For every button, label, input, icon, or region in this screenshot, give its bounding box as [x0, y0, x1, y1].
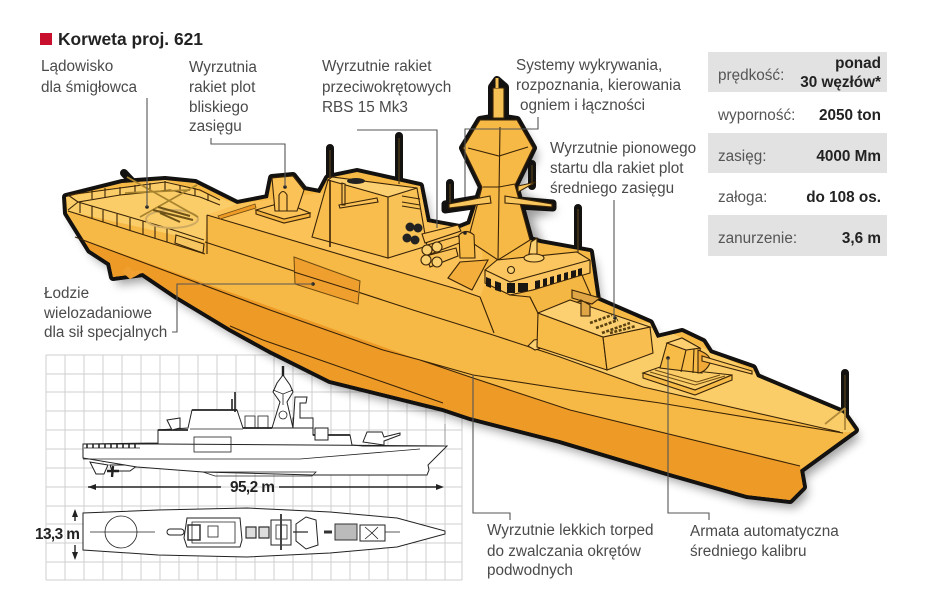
label: boats: Łodzie — [44, 285, 89, 302]
label: anti-ship missile launchers: Wyrzutnie rakiet — [322, 58, 432, 75]
label: short range SAM launcher: zasięgu — [189, 118, 242, 135]
dimension: beam 13,3 m — [35, 509, 79, 560]
label: helicopter deck: Lądowisko — [41, 58, 113, 75]
lower hull — [84, 241, 803, 500]
aft superstructure — [312, 177, 427, 258]
panel: technical data table: zasięg: — [718, 148, 766, 165]
panel: technical data table — [708, 52, 887, 256]
label: boats: dla sił specjalnych — [44, 324, 167, 341]
label: main gun: Armata automatyczna — [690, 523, 839, 540]
panel: technical data table: 2050 ton — [819, 107, 881, 124]
side elevation — [83, 366, 447, 477]
fore deck — [537, 313, 855, 432]
panel: technical data table: ponad — [835, 55, 881, 72]
hull body — [66, 172, 855, 500]
flight deck — [66, 180, 237, 242]
panel: technical data table: do 108 os. — [806, 189, 881, 206]
panel: technical data table: 4000 Mm — [816, 148, 881, 165]
panel: technical data table: 30 węzłów* — [800, 74, 881, 91]
side panel: boat bay — [294, 257, 360, 304]
bow jack staff — [825, 408, 845, 430]
panel: scale drawings on grid — [35, 355, 462, 580]
bridge — [485, 238, 592, 350]
label: detection systems: Systemy wykrywania, — [516, 57, 662, 74]
panel: technical data table: 3,6 m — [842, 230, 881, 247]
label: helicopter deck: dla śmigłowca — [41, 79, 138, 96]
panel: technical data table: wyporność: — [717, 107, 795, 124]
title: Korweta proj. 621 — [58, 29, 203, 49]
stern propeller — [122, 266, 146, 279]
hull shadow — [71, 128, 860, 508]
dimension: beam 13,3 m: 13,3 m — [35, 526, 79, 543]
label: short range SAM launcher: rakiet plot — [189, 79, 256, 96]
label: main gun: średniego kalibru — [690, 543, 806, 560]
main gun — [643, 338, 752, 395]
label: boats: wielozadaniowe — [43, 305, 152, 322]
flight deck rails and helipad — [68, 177, 220, 253]
label: short range SAM launcher: Wyrzutnia — [189, 59, 257, 76]
label: torpedoes: do zwalczania okrętów — [487, 543, 642, 560]
VLS block — [537, 290, 653, 370]
panel: technical data table: zanurzenie: — [718, 230, 797, 247]
illustration: corvette — [60, 78, 870, 520]
panel: technical data table: prędkość: — [718, 67, 784, 84]
plan view — [83, 508, 445, 557]
label: torpedoes: Wyrzutnie lekkich torped — [487, 522, 654, 539]
main deck — [207, 186, 485, 297]
grid — [46, 355, 462, 580]
launcher: short range SAM — [218, 176, 310, 223]
label: torpedoes: podwodnych — [487, 562, 573, 579]
label: anti-ship missile launchers: RBS 15 Mk3 — [322, 99, 408, 116]
label: vertical launch: Wyrzutnie pionowego — [550, 140, 696, 157]
label: detection systems: ogniem i łączności — [520, 97, 645, 114]
label: detection systems: rozpoznania, kierowania — [516, 77, 681, 94]
label: vertical launch: startu dla rakiet plot — [550, 160, 684, 177]
hull lines — [68, 211, 843, 466]
black outline and masts — [66, 80, 855, 500]
dimension: length 95,2 m: 95,2 m — [230, 479, 274, 496]
launcher: anti-ship missiles — [402, 222, 462, 267]
main mast — [330, 78, 845, 425]
label: anti-ship missile launchers: przeciwokrętowych — [322, 79, 451, 96]
dimension: length 95,2 m — [88, 479, 444, 496]
label: short range SAM launcher: bliskiego — [189, 99, 249, 116]
panel: technical data table: załoga: — [718, 189, 767, 206]
leader lines — [147, 98, 709, 520]
label: vertical launch: średniego zasięgu — [550, 180, 674, 197]
